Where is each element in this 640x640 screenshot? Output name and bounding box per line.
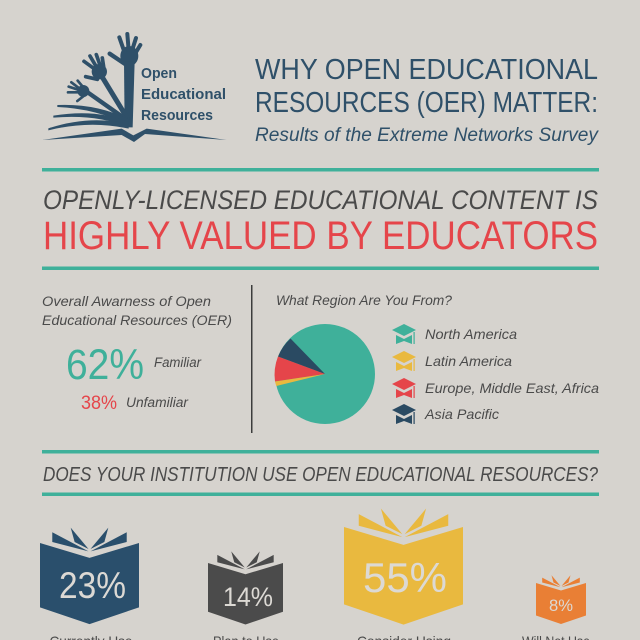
book: plan to use 14%: 14% [223, 582, 273, 612]
book: plan to use 14% [208, 551, 283, 640]
panel: overall awareness: 38% [81, 393, 117, 414]
book: currently use 23%: 23% [59, 565, 126, 606]
legend: latin america [392, 351, 512, 371]
book: will not use 8%: 8% [549, 596, 573, 615]
logo: open educational resources: Open [141, 65, 177, 82]
title [255, 54, 599, 146]
logo: open educational resources [42, 34, 227, 142]
legend: asia pacific [392, 404, 499, 424]
panel: overall awareness: Overall Awarness of Open [42, 293, 211, 309]
panel: region [275, 292, 599, 424]
panel: region: What Region Are You From? [276, 292, 452, 308]
logo: open educational resources: Resources [141, 107, 213, 124]
title: Results of the Extreme Networks Survey [255, 125, 599, 146]
legend: latin america: Latin America [425, 353, 512, 369]
title: WHY OPEN EDUCATIONAL [255, 54, 598, 86]
book: will not use 8% [522, 575, 590, 640]
panel: overall awareness: Educational Resources (OER) [42, 312, 232, 328]
legend: asia pacific: Asia Pacific [424, 406, 499, 422]
book: consider using 55%: 55% [363, 554, 447, 601]
panel: overall awareness: Familiar [154, 355, 201, 370]
pie chart [275, 324, 375, 424]
book: consider using 55% [344, 509, 463, 640]
heading [43, 185, 598, 258]
book: currently use 23% [40, 528, 139, 640]
panel: overall awareness: 62% [66, 341, 144, 389]
panel: overall awareness: Unfamiliar [126, 395, 189, 410]
legend: north america: North America [425, 326, 517, 342]
legend: europe, middle east, africa: Europe, Middle East, Africa [425, 380, 599, 396]
legend: north america [392, 324, 517, 344]
panel: overall awareness [42, 293, 232, 414]
logo: open educational resources: Educational [141, 86, 226, 103]
legend: europe, middle east, africa [392, 378, 599, 398]
